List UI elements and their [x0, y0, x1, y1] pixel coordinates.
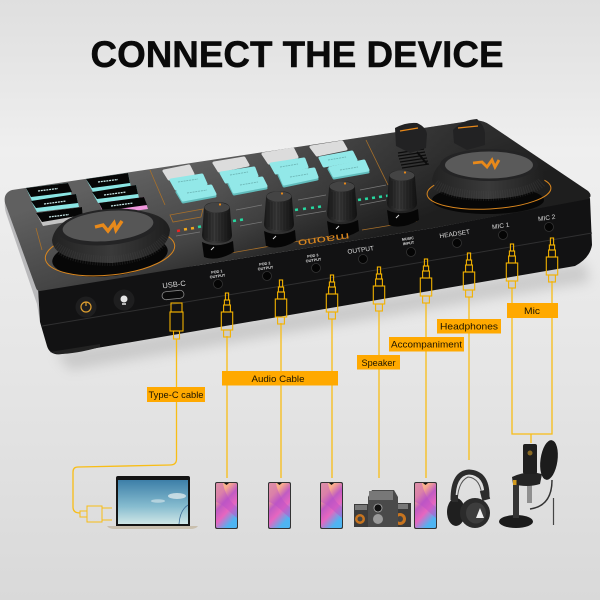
small knob 1: [202, 202, 234, 259]
label: Headphones: Headphones: [440, 322, 498, 332]
icon: phone 1: [215, 482, 238, 529]
port POD 2: [257, 261, 274, 280]
port HEADSET: [439, 229, 471, 248]
jack 6: [463, 253, 475, 297]
port MUSIC INPUT: MUSIC: [402, 236, 414, 242]
device floor shadow: [55, 262, 590, 370]
mic cable lines: [512, 281, 552, 443]
label: Mic: [507, 303, 558, 318]
label: Speaker: [357, 355, 400, 370]
device front face: [38, 198, 592, 354]
left jog wheel: [43, 205, 177, 282]
power button: [76, 296, 96, 318]
cyan pads: [171, 152, 368, 200]
port POD 3: OUTPUT: [305, 257, 322, 264]
small knob 4: [387, 170, 419, 227]
jack 7: [506, 244, 518, 288]
left button group: [26, 173, 148, 226]
icon: speakers: [354, 490, 411, 527]
top surface right shading: [220, 120, 590, 262]
light button: [114, 290, 134, 310]
foot: [50, 344, 100, 354]
icon: phone 4: [414, 482, 437, 529]
cyan pad shadows: [177, 162, 368, 202]
label: Speaker: Speaker: [362, 358, 396, 369]
port MIC 1: MIC 1: [492, 222, 510, 231]
port POD 1: POD 1: [211, 269, 223, 275]
jack 5: [420, 259, 432, 303]
label: Mic: Mic: [524, 306, 540, 317]
jack 3: [326, 275, 338, 319]
device top surface: [5, 120, 591, 291]
white pads: [164, 142, 346, 179]
label: Audio Cable: Audio Cable: [252, 374, 304, 385]
USB-C cable line: [73, 339, 176, 513]
port POD 3: [305, 253, 322, 272]
USB-C connector: [170, 303, 183, 339]
port MUSIC INPUT: INPUT: [403, 241, 415, 246]
icon: microphone: [499, 439, 560, 528]
port MIC 1: [492, 222, 510, 240]
label: Type-C cable: Type-C cable: [148, 390, 204, 401]
port POD 3: POD 3: [307, 253, 319, 259]
label: Headphones: [437, 319, 501, 334]
logo: [95, 221, 122, 231]
jack 8: [546, 238, 558, 282]
small knob 2: [264, 191, 296, 248]
jack 2: [275, 280, 287, 324]
icon: headphones: [447, 472, 490, 528]
port POD 1: [209, 269, 226, 288]
icon: phone 3: [320, 482, 343, 529]
icon: laptop: [107, 476, 198, 529]
icon: phone 2: [268, 482, 291, 529]
USB-C port: USB-C: [162, 279, 187, 290]
port POD 2: POD 2: [259, 261, 271, 267]
port POD 2: OUTPUT: [257, 265, 274, 272]
port HEADSET: HEADSET: [439, 229, 471, 240]
label: Audio Cable: [222, 371, 338, 386]
label: Accompaniment: [389, 337, 464, 352]
port MIC 2: MIC 2: [538, 214, 556, 223]
cables: [73, 281, 552, 513]
printed lines: [36, 140, 417, 254]
port MUSIC INPUT: [402, 236, 416, 256]
audio mixer device: [5, 119, 592, 354]
slider 2: [453, 119, 485, 150]
device left side: [5, 202, 40, 322]
logo: [473, 160, 499, 167]
label: Accompaniment: Accompaniment: [391, 340, 462, 350]
jack 1: [221, 293, 233, 337]
port OUTPUT: [347, 245, 375, 264]
jack 4: [373, 267, 385, 311]
port POD 1: OUTPUT: [209, 273, 226, 280]
port OUTPUT: OUTPUT: [347, 245, 375, 256]
front seam: [42, 233, 592, 326]
slider 1: [395, 123, 429, 168]
port MIC 2: [538, 214, 556, 232]
title: CONNECT THE DEVICE: [90, 33, 504, 75]
icon: power plug: [80, 506, 112, 522]
pad buttons: [164, 142, 368, 202]
printed brand mark: maono: [296, 230, 350, 248]
right jog wheel: [426, 149, 552, 214]
audio cable lines: [227, 297, 469, 478]
USB-C port: [162, 279, 187, 300]
level meter LEDs: [177, 196, 389, 231]
small knob 3: [327, 181, 359, 238]
